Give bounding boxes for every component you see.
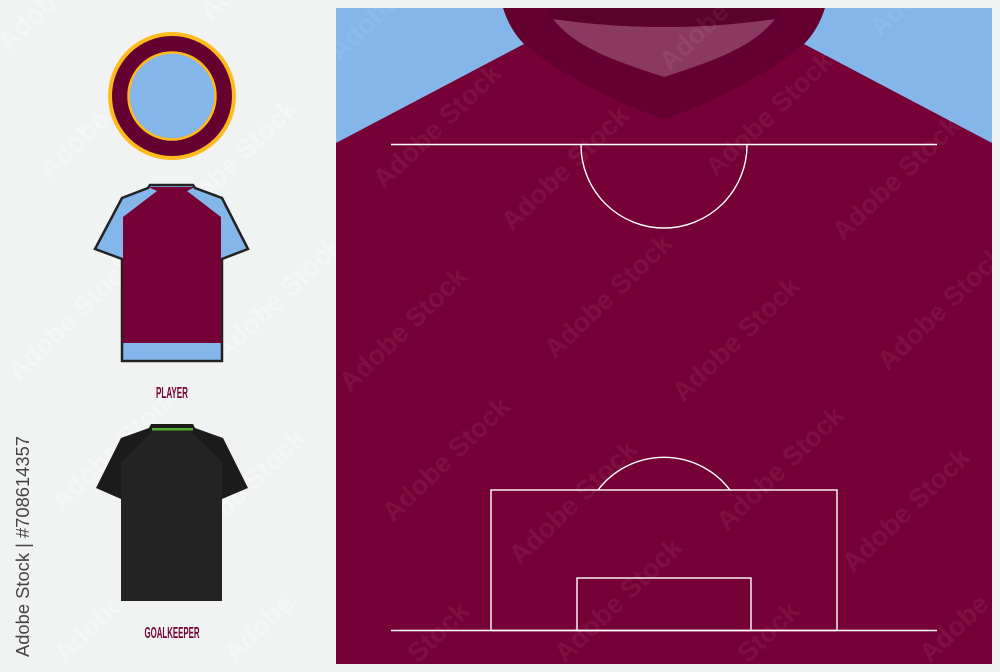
watermarks over artwork: Adobe Stock (836, 441, 977, 578)
watermarks on sheet: Adobe Stock (171, 422, 312, 559)
collar top shadow (548, 8, 780, 27)
watermarks on sheet (0, 0, 349, 668)
pitch lines (391, 144, 937, 630)
watermarks over artwork (323, 0, 1000, 668)
panel: enlarged shirt with pitch lines (336, 8, 992, 664)
watermarks over artwork: Adobe Stock (376, 390, 517, 527)
icon: club badge (110, 34, 234, 158)
watermarks on sheet: Adobe Stock (1, 249, 142, 386)
watermarks over artwork: Adobe Stock (538, 227, 679, 364)
watermarks over artwork: Adobe Stock (333, 260, 474, 397)
icon: player shirt (95, 185, 248, 361)
watermarks on sheet: Adobe Stock (45, 379, 186, 516)
icon: goalkeeper shirt (96, 424, 248, 601)
watermarks over artwork: Stock (401, 595, 476, 668)
watermarks on sheet: Adobe Stock (163, 92, 304, 229)
watermarks over artwork: Stock (731, 595, 806, 668)
watermarks over artwork: Adobe Stock (699, 45, 840, 182)
kit template sheet: GOALKEEPER (144, 625, 200, 642)
watermarks over artwork: Adobe Stock (367, 57, 508, 194)
watermarks on sheet: Adobe Stock (48, 531, 189, 668)
watermarks over artwork: Adobe (913, 588, 995, 668)
watermarks over artwork: Adobe Stock (503, 433, 644, 570)
collar inner lining (553, 19, 775, 77)
watermarks on sheet: Adobe (218, 588, 300, 668)
watermarks on sheet: Adobe Stock (208, 229, 349, 366)
watermarks over artwork: Adobe Stock (548, 531, 689, 668)
watermarks over artwork: Adobe Stock (826, 109, 967, 246)
collar outer band (503, 8, 825, 119)
label: player: PLAYER (156, 385, 188, 402)
watermarks over artwork: Adobe Stock (495, 99, 636, 236)
watermarks on sheet: Adobe Stock (33, 47, 174, 184)
watermarks over artwork: Adobe Stock (666, 270, 807, 407)
stock id text: Adobe Stock | #708614357 (13, 436, 33, 657)
watermarks over artwork: Adobe Stock (710, 399, 851, 536)
